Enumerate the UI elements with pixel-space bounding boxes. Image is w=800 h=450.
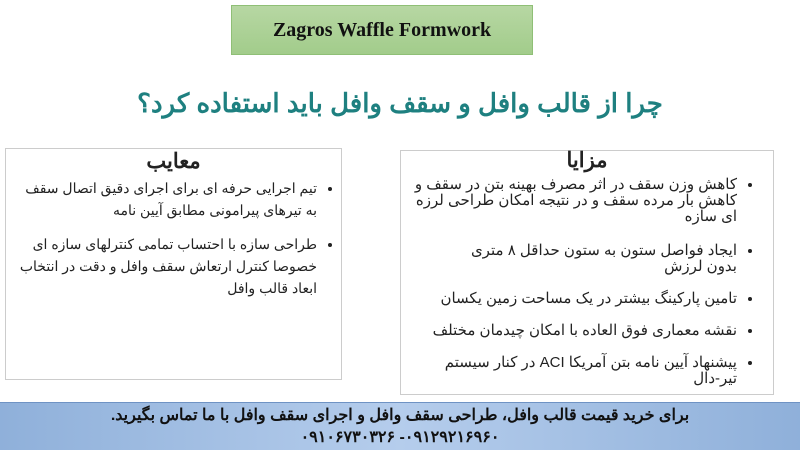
header box: [231, 5, 533, 55]
heading: disadvantages: معایب: [146, 150, 201, 173]
list: advantages: تامین پارکینگ بیشتر در یک مساحت زمین یکسان: [440, 290, 737, 307]
list: advantages: پیشنهاد آیین نامه بتن آمریکا ACI در کنار سیستم تیر-دال: [445, 354, 737, 387]
footer contact bar: [0, 402, 800, 450]
list: disadvantages: [20, 180, 332, 296]
list: advantages: نقشه معماری فوق العاده با امکان چیدمان مختلف: [433, 322, 737, 339]
footer contact bar: برای خرید قیمت قالب وافل، طراحی سقف وافل و اجرای سقف وافل با ما تماس بگیرید.: [111, 407, 689, 424]
list: disadvantages: تیم اجرایی حرفه ای برای اجرای دقیق اتصال سقف به تیرهای پیرامونی مطابق آیین نامه: [25, 180, 317, 218]
list: disadvantages: طراحی سازه با احتساب تمامی کنترلهای سازه ای خصوصا کنترل ارتعاش سقف وافل و دقت در انتخاب ابعاد قالب وافل: [20, 236, 317, 296]
list: advantages: ایجاد فواصل ستون به ستون حداقل ۸ متری بدون لرزش: [471, 242, 737, 275]
list: advantages: کاهش وزن سقف در اثر مصرف بهینه بتن در سقف و کاهش بار مرده سقف و در نتیجه امکان طراحی لرزه ای سازه: [415, 176, 737, 225]
title: چرا از قالب وافل و سقف وافل باید استفاده کرد؟: [137, 88, 663, 118]
panel: advantages: [400, 150, 774, 395]
heading: advantages: مزایا: [567, 149, 607, 172]
panel: disadvantages: [5, 148, 342, 380]
footer contact bar: ۰۹۱۲۹۲۱۶۹۶۰- ۰۹۱۰۶۷۳۰۳۲۶: [301, 429, 499, 446]
list: advantages: [414, 176, 752, 387]
header box: Zagros Waffle Formwork: [273, 18, 491, 40]
